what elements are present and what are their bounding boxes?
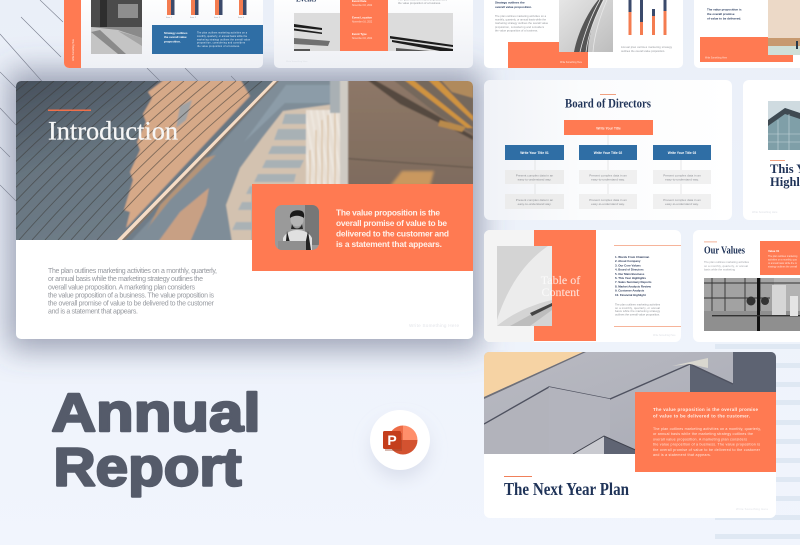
footer: Write Something Here bbox=[736, 507, 768, 511]
orange callout: overall value proposition. A marketing plan considers bbox=[653, 437, 747, 441]
chart caption: outlines the overall value proposition. bbox=[621, 50, 665, 53]
heading: Our Values bbox=[704, 246, 745, 256]
accent rule bbox=[48, 110, 91, 111]
orange events column: November 16, 2022 bbox=[352, 37, 373, 40]
main title: Annual Report: Annual bbox=[52, 383, 260, 443]
architecture photo bbox=[559, 0, 613, 52]
orange column bbox=[534, 230, 596, 341]
orange events column bbox=[340, 0, 388, 51]
glass building photo bbox=[768, 101, 800, 150]
footer: Write Something Here bbox=[653, 334, 676, 337]
side strip label: Write Something Here bbox=[72, 38, 75, 61]
slide: chart and strategy (top left) bbox=[64, 0, 263, 68]
blue callout: monthly, quarterly, or annual basis while the bbox=[197, 35, 248, 38]
heading: Board of Directors bbox=[565, 96, 651, 110]
blue box 02 bbox=[579, 145, 637, 160]
blue callout: proposition. bbox=[164, 39, 181, 43]
orange value card: The plan outlines marketing bbox=[768, 255, 798, 258]
paragraph: basis while the marketing bbox=[704, 268, 736, 272]
paragraph: The plan outlines marketing activities on a bbox=[495, 15, 547, 18]
orange value card: or annual basis while the m bbox=[768, 262, 797, 265]
orange callout bbox=[635, 392, 776, 472]
architecture hero image bbox=[0, 79, 475, 242]
paragraph: the value proposition of a business. bbox=[495, 29, 538, 32]
slide: strategy with chart (top right) bbox=[484, 0, 683, 68]
body paragraph: The plan outlines marketing activities on a monthly, quarterly, bbox=[48, 268, 217, 275]
brown wall bbox=[348, 79, 475, 186]
body paragraph: overall value proposition. A marketing plan considers bbox=[48, 284, 196, 291]
contents list: 2. About Company bbox=[615, 259, 641, 263]
portrait photo bbox=[275, 205, 319, 250]
blue box 02: Write Your Title 02 bbox=[594, 151, 622, 155]
icon: PowerPoint badge: P bbox=[387, 432, 397, 448]
light beam bbox=[117, 81, 277, 240]
body paragraph: or annual basis while the marketing strategy outlines the bbox=[48, 276, 203, 283]
background diagonal lines bbox=[0, 0, 236, 201]
slide: Table of Content bbox=[484, 230, 681, 342]
orange events column: November 16, 2022 bbox=[352, 4, 373, 7]
grey boxes row 2 bbox=[505, 194, 711, 209]
slide: events (top centre) bbox=[274, 0, 473, 68]
contents list: 3. Our Core Values bbox=[615, 263, 641, 267]
lines on slats bbox=[0, 81, 262, 240]
blue callout: marketing strategy outlines the overall value bbox=[197, 38, 251, 41]
blue box 01: Write Your Title 01 bbox=[520, 151, 549, 155]
architecture photo bbox=[497, 246, 552, 326]
paragraph: monthly, quarterly, or annual basis while the bbox=[495, 19, 547, 22]
building photo bbox=[484, 352, 776, 454]
grey boxes row 1: Present complex data in an bbox=[516, 174, 554, 178]
heading text: Strategy outlines the bbox=[495, 0, 525, 4]
title: Table of bbox=[541, 273, 580, 287]
footer label: Write Something Here bbox=[705, 56, 728, 60]
contents list: 8. Market Analysis Review bbox=[615, 284, 652, 288]
orange value card: activities on a monthly, qua bbox=[768, 258, 797, 262]
paragraph: proposition, considering and considers bbox=[495, 26, 545, 29]
blue callout: the value proposition of a business. bbox=[197, 45, 240, 48]
contents list: 5. Our Main Business bbox=[615, 272, 645, 276]
footer: Write Something Here bbox=[752, 210, 778, 214]
grey boxes row 2: Present complex data in an bbox=[663, 198, 701, 202]
rule top bbox=[614, 244, 681, 247]
orange value card bbox=[760, 241, 800, 275]
background stripes: bottom right bbox=[715, 344, 800, 539]
paragraph: on a monthly, quarterly, or annual bbox=[615, 306, 660, 310]
grey boxes row 1: Present complex data in an bbox=[589, 174, 627, 178]
orange value callout bbox=[252, 184, 473, 271]
value text: The value proposition is bbox=[707, 8, 742, 12]
cream curved slats bbox=[225, 104, 331, 240]
slide: The Next Year Plan bbox=[484, 352, 776, 518]
grey zone below beam bbox=[130, 79, 335, 242]
contents list: 6. This Year Highlights bbox=[615, 276, 646, 280]
stacked bar chart bbox=[628, 0, 666, 35]
orange callout: or annual basis while the marketing strategy outlines the bbox=[653, 432, 753, 436]
value text: the overall promise bbox=[707, 12, 735, 16]
description text: the value proposition of a business. bbox=[398, 1, 441, 5]
orange events column: Event Location bbox=[352, 16, 372, 20]
contents list: 9. Customer Analysis bbox=[615, 289, 645, 293]
top box bbox=[564, 120, 653, 135]
orange block bbox=[508, 42, 588, 68]
slide title: The Next Year Plan bbox=[504, 479, 629, 499]
callout text: is a statement that appears. bbox=[336, 239, 442, 249]
paragraph: outlines the overall value proposition. bbox=[615, 312, 660, 316]
grey boxes row 2: easy-to-understand way. bbox=[518, 202, 551, 206]
title: Content bbox=[542, 285, 580, 299]
orange events column: Event Type bbox=[352, 32, 367, 36]
orange value card: Value 01 bbox=[768, 249, 780, 253]
accent rule bbox=[504, 476, 532, 477]
slide: value proposition (top far right) bbox=[694, 0, 800, 68]
orange events column: November 16, 2022 bbox=[352, 20, 373, 24]
heading text: overall value proposition. bbox=[495, 5, 532, 9]
grey boxes row 2: easy-to-understand way. bbox=[591, 202, 625, 206]
orange callout: The plan outlines marketing activities on a monthly, quarterly, bbox=[653, 427, 761, 431]
grey boxes row 1: Present complex data in an bbox=[663, 174, 701, 178]
peach slats above beam bbox=[124, 79, 250, 228]
grey boxes row 1: easy-to-understand way. bbox=[518, 178, 551, 182]
orange value card: strategy outlines the overall bbox=[768, 266, 798, 268]
bar chart: Item 4 bbox=[238, 16, 245, 19]
grey boxes row 1 bbox=[505, 170, 711, 184]
footer label: Write Something Here bbox=[560, 61, 583, 64]
blue callout: The plan outlines marketing activities on a bbox=[197, 32, 248, 34]
main title: Annual Report bbox=[52, 383, 260, 498]
paragraph: marketing strategy outlines the overall value bbox=[495, 22, 549, 25]
callout text: overall promise of value to be bbox=[336, 218, 447, 228]
footer: Write Something Here bbox=[409, 323, 459, 328]
blue box 03: Write Your Title 03 bbox=[668, 151, 696, 155]
bar chart bbox=[166, 0, 246, 19]
body paragraph: the value proposition of a business. The value proposition is bbox=[48, 292, 214, 299]
bar chart: Item 1 bbox=[166, 16, 173, 19]
orange block bbox=[700, 37, 793, 62]
contents list: 4. Board of Directors bbox=[615, 268, 644, 272]
accent rule bbox=[770, 160, 785, 161]
blue callout: Strategy outlines bbox=[164, 31, 188, 35]
grey boxes row 2: easy-to-understand way. bbox=[665, 202, 699, 206]
paragraph: basis while the marketing strategy bbox=[615, 309, 661, 313]
white columns bbox=[306, 110, 340, 186]
greyscale interior photo bbox=[91, 0, 142, 54]
blue box 01 bbox=[505, 145, 564, 160]
grey boxes row 2: Present complex data in an bbox=[516, 198, 554, 202]
value text: of value to be delivered. bbox=[707, 16, 741, 20]
footer: Write Something Here bbox=[286, 60, 308, 63]
grey boxes row 1: easy-to-understand way. bbox=[591, 178, 625, 182]
connectors bbox=[535, 135, 681, 194]
chart caption: Annual plan outlines marketing strategy bbox=[621, 46, 673, 49]
beige interior photo bbox=[768, 0, 800, 55]
paragraph: on a monthly, quarterly, or annual bbox=[704, 264, 748, 268]
slide: Board of Directors bbox=[484, 80, 732, 220]
slide: Our Values bbox=[693, 230, 800, 342]
slide title: Introduction bbox=[48, 117, 178, 146]
accent rule bbox=[704, 240, 717, 243]
rule bottom bbox=[614, 325, 681, 328]
greyscale lobby photo bbox=[704, 278, 800, 331]
blue callout: the overall value bbox=[164, 35, 187, 39]
orange callout: and is a statement that appears. bbox=[653, 453, 711, 457]
slide: Introduction (main) bbox=[0, 79, 475, 339]
grey boxes row 1: easy-to-understand way. bbox=[665, 178, 699, 182]
accent rule bbox=[600, 94, 616, 95]
body paragraph: the overall promise of value to be delivered to the customer bbox=[48, 300, 215, 307]
grey boxes row 2: Present complex data in an bbox=[589, 198, 627, 202]
top box: Write Your Title bbox=[596, 126, 621, 130]
orange callout: The value proposition is the overall promise bbox=[653, 407, 759, 412]
building photo strip bbox=[294, 13, 453, 51]
blue callout bbox=[152, 25, 263, 54]
slide: This Year's Highlights bbox=[743, 80, 800, 220]
orange side strip bbox=[64, 0, 81, 68]
blue callout: proposition, considering and considers bbox=[197, 42, 246, 45]
peach slats below beam bbox=[150, 154, 216, 226]
blue box 03 bbox=[653, 145, 711, 160]
orange callout: the value proposition of a business. The value proposition is bbox=[653, 443, 760, 447]
orange callout: of value to be delivered to the customer. bbox=[653, 414, 750, 418]
paragraph: The plan outlines marketing activities bbox=[704, 260, 750, 264]
bar chart: Item 3 bbox=[214, 16, 221, 19]
main title: Annual Report: Report bbox=[54, 438, 242, 498]
body paragraph: and is a statement that appears. bbox=[48, 308, 138, 315]
bar chart: Item 2 bbox=[190, 16, 197, 19]
contents list: 7. Sales Summary Reports bbox=[615, 280, 652, 284]
contents list: 1. Words From Chairman bbox=[615, 255, 650, 259]
callout text: delivered to the customer and bbox=[336, 228, 449, 238]
contents list: 10. Financial Highlight bbox=[615, 293, 646, 297]
paragraph: The plan outlines marketing activities bbox=[615, 302, 661, 306]
icon: PowerPoint badge bbox=[370, 410, 430, 478]
orange callout: the overall promise of value to be delivered to the customer bbox=[653, 448, 761, 452]
callout text: The value proposition is the bbox=[336, 208, 440, 218]
